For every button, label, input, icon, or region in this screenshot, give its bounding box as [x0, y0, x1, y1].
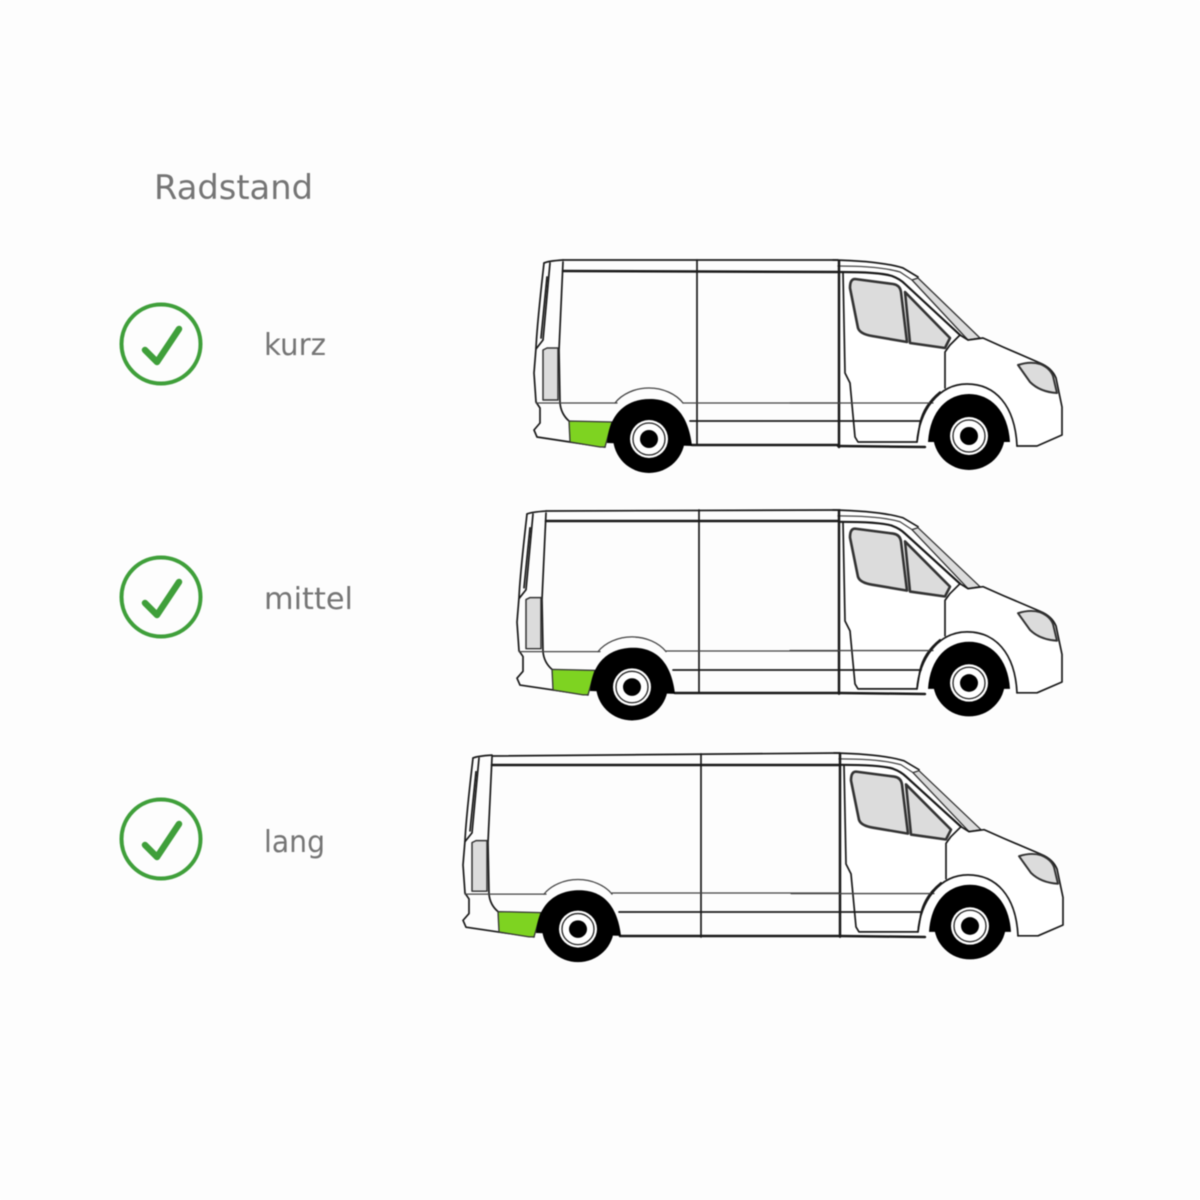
van: long wheelbase [463, 753, 1063, 962]
row: mittel [122, 558, 353, 636]
title: Radstand [154, 168, 313, 208]
icon: check mittel [122, 558, 200, 636]
row: lang [122, 800, 325, 878]
van: medium wheelbase [517, 510, 1062, 720]
label: mittel: mittel [264, 582, 353, 617]
van: short wheelbase [534, 260, 1062, 473]
label: lang: lang [264, 825, 325, 860]
row: kurz [122, 304, 326, 384]
label: kurz: kurz [264, 328, 326, 363]
icon: check kurz [122, 304, 200, 384]
icon: check lang [122, 800, 200, 878]
